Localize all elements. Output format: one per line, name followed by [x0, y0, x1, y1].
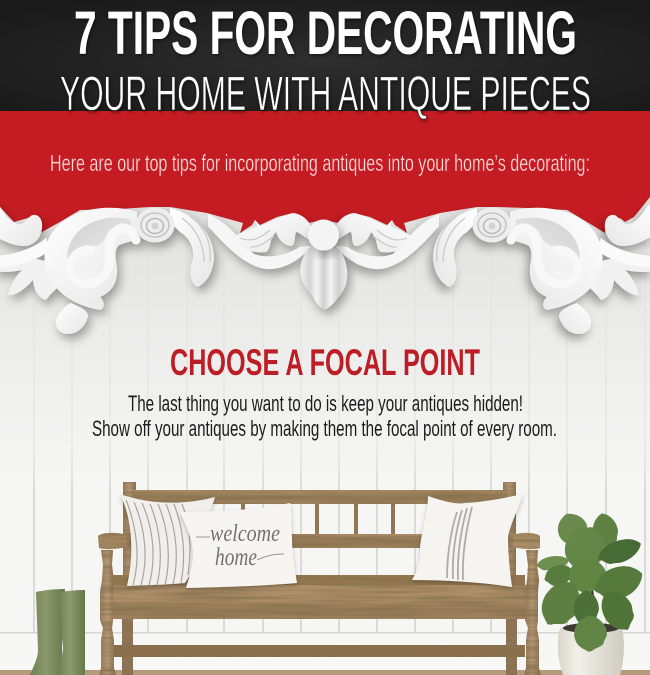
plant — [533, 509, 648, 675]
red banner — [0, 108, 650, 233]
central pendant — [300, 247, 347, 310]
rear legs — [122, 619, 133, 675]
stripe pillow right — [412, 494, 523, 587]
side arm — [0, 238, 50, 268]
body text — [92, 391, 557, 441]
central ball — [308, 220, 339, 250]
heading: choose a focal point: CHOOSE A FOCAL POINT — [170, 342, 480, 383]
plaster ornament — [0, 203, 650, 334]
right leg and arm — [524, 592, 541, 675]
welcome home pillow: welcome — [210, 521, 280, 547]
wall panelling background — [0, 190, 650, 675]
back posts — [123, 482, 136, 582]
rose — [136, 208, 174, 242]
flower pot — [558, 624, 624, 675]
left leg and arm — [99, 592, 116, 675]
title — [60, 0, 591, 121]
leaves — [533, 509, 648, 652]
far edge scroll — [0, 203, 42, 246]
welcome home pillow — [180, 503, 297, 588]
scroll bud — [73, 256, 97, 280]
S curl — [70, 228, 136, 284]
welcome home pillow: home — [215, 544, 257, 571]
acanthus — [170, 208, 214, 287]
back rails — [134, 490, 506, 504]
dark header band — [0, 0, 650, 111]
big scroll body — [45, 208, 137, 310]
boots — [30, 589, 85, 675]
lower rail — [113, 645, 525, 657]
wooden bench — [98, 482, 541, 675]
striped pillow — [120, 494, 215, 586]
foot bud — [56, 303, 88, 334]
spindles — [243, 504, 393, 534]
seat — [113, 575, 525, 587]
scroll recess — [67, 218, 131, 262]
leaf cluster — [230, 213, 311, 252]
main swag — [208, 214, 312, 269]
side leaves — [0, 258, 60, 300]
apron — [113, 600, 527, 619]
